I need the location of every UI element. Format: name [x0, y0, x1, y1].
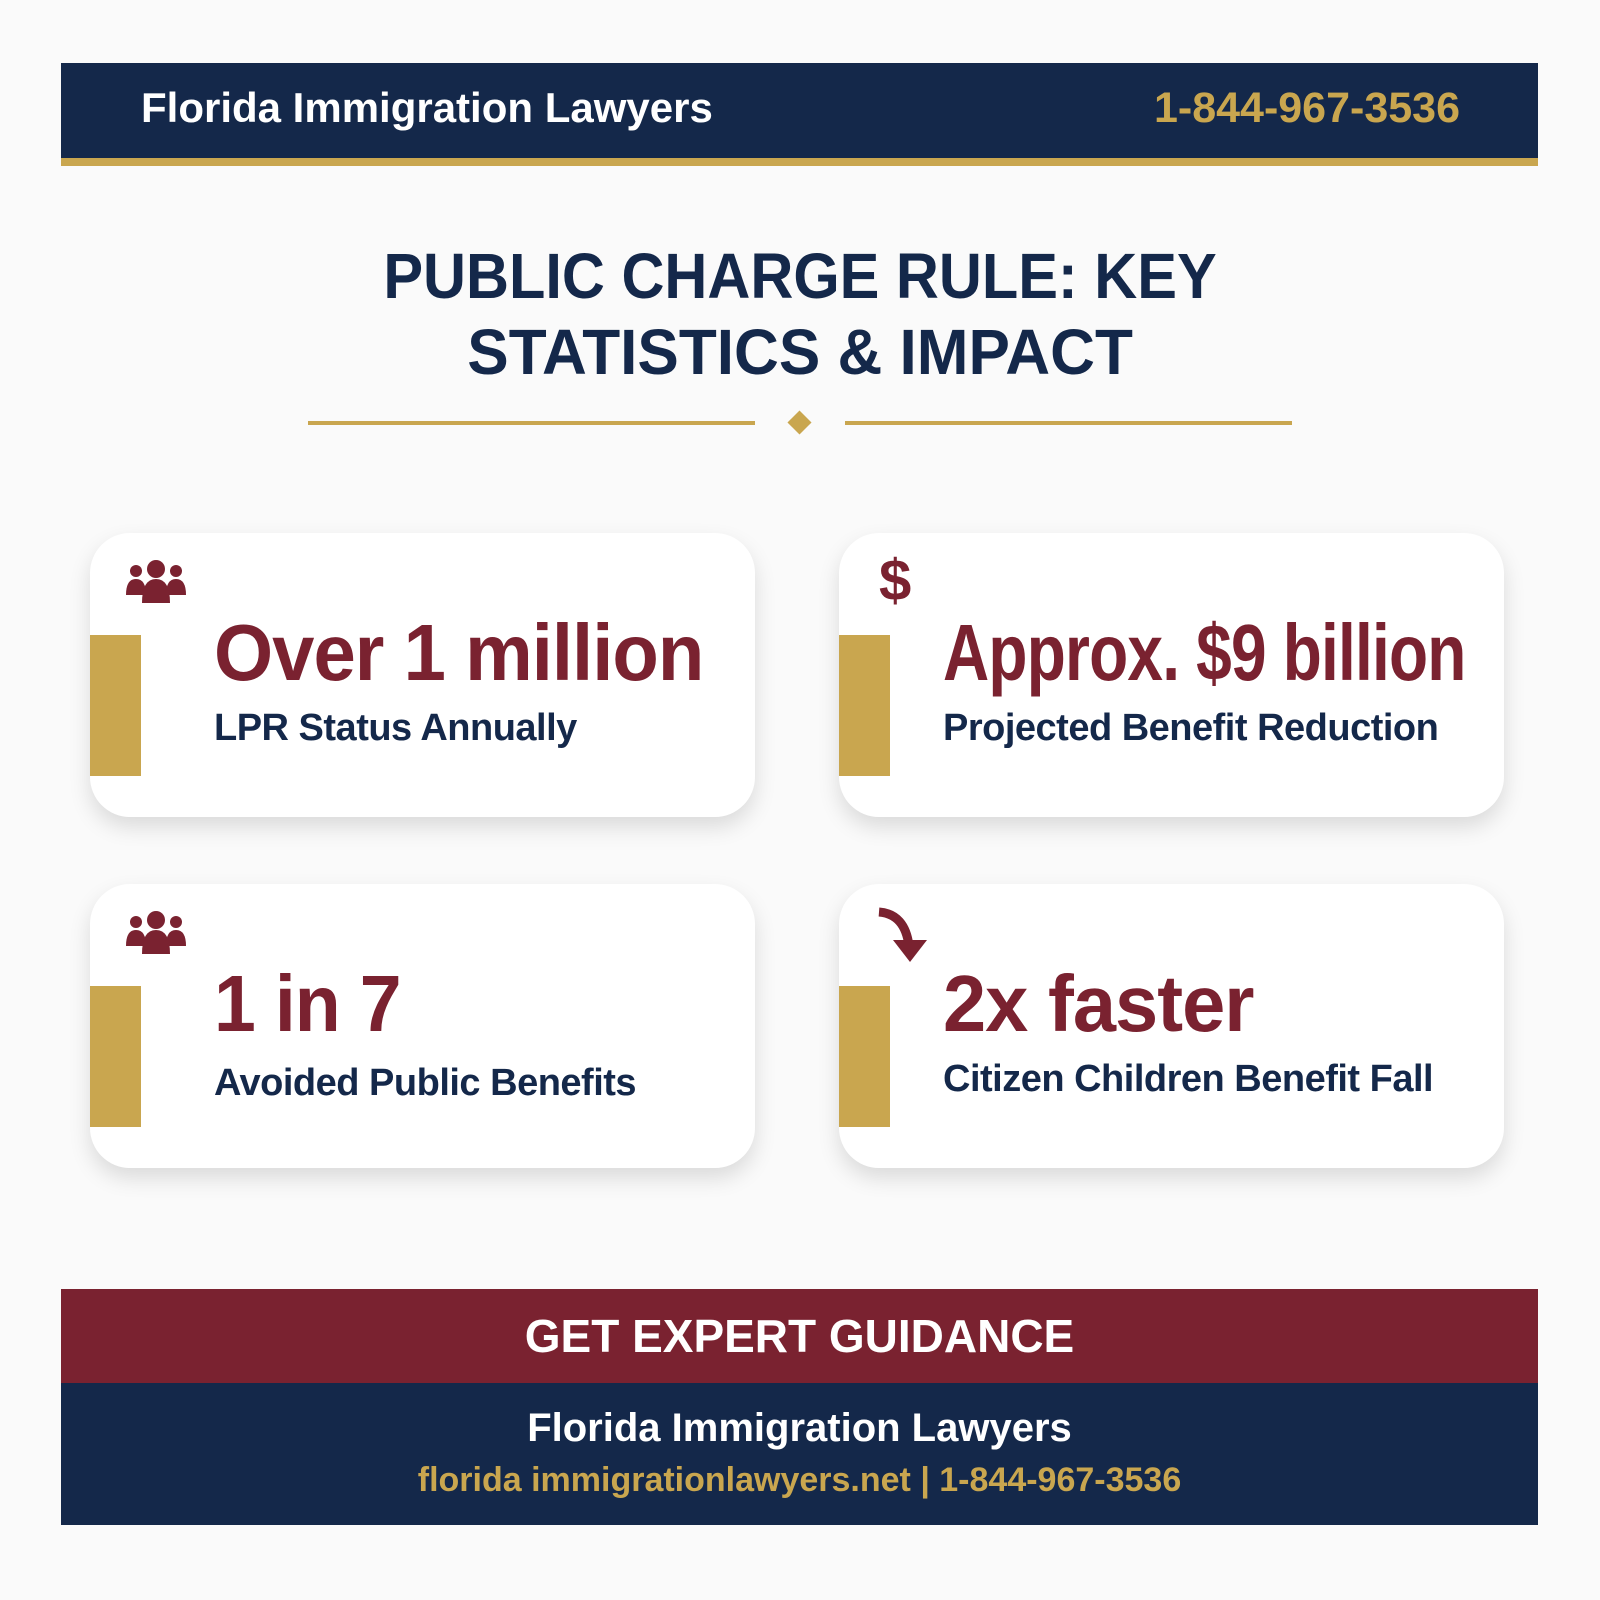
icon: dollar: $ — [879, 548, 911, 613]
card: 2x faster — [839, 884, 1504, 1168]
icon: people — [126, 911, 186, 954]
header firm name: Florida Immigration Lawyers — [141, 84, 713, 131]
icon: people — [126, 560, 186, 603]
card: 9 billion: Approx. $9 billion — [943, 608, 1466, 697]
card: 1 in 7: Avoided Public Benefits — [214, 1062, 636, 1104]
footer navy — [61, 1383, 1538, 1525]
title: STATISTICS & IMPACT — [467, 316, 1133, 388]
card: over 1 million: Over 1 million — [214, 608, 703, 697]
icon: curved arrow — [878, 908, 927, 962]
CTA red band: GET EXPERT GUIDANCE — [525, 1310, 1074, 1362]
header bar — [61, 63, 1538, 166]
CTA red band — [61, 1289, 1538, 1383]
title — [383, 240, 1217, 388]
header phone: 1-844-967-3536 — [1154, 84, 1460, 132]
card: 1 in 7: 1 in 7 — [214, 959, 401, 1048]
title divider — [308, 410, 1292, 434]
card: 2x faster: 2x faster — [943, 959, 1254, 1048]
card: 9 billion — [839, 533, 1504, 817]
card: 2x faster: Citizen Children Benefit Fall — [943, 1058, 1433, 1100]
card: over 1 million: LPR Status Annually — [214, 707, 577, 749]
card: over 1 million — [90, 533, 755, 817]
footer firm name: Florida Immigration Lawyers — [527, 1406, 1072, 1450]
card: 9 billion: Projected Benefit Reduction — [943, 707, 1438, 749]
footer contact: florida immigrationlawyers.net | 1-844-967-3536 — [418, 1461, 1181, 1499]
card: 1 in 7 — [90, 884, 755, 1168]
title: PUBLIC CHARGE RULE: KEY — [383, 240, 1217, 312]
